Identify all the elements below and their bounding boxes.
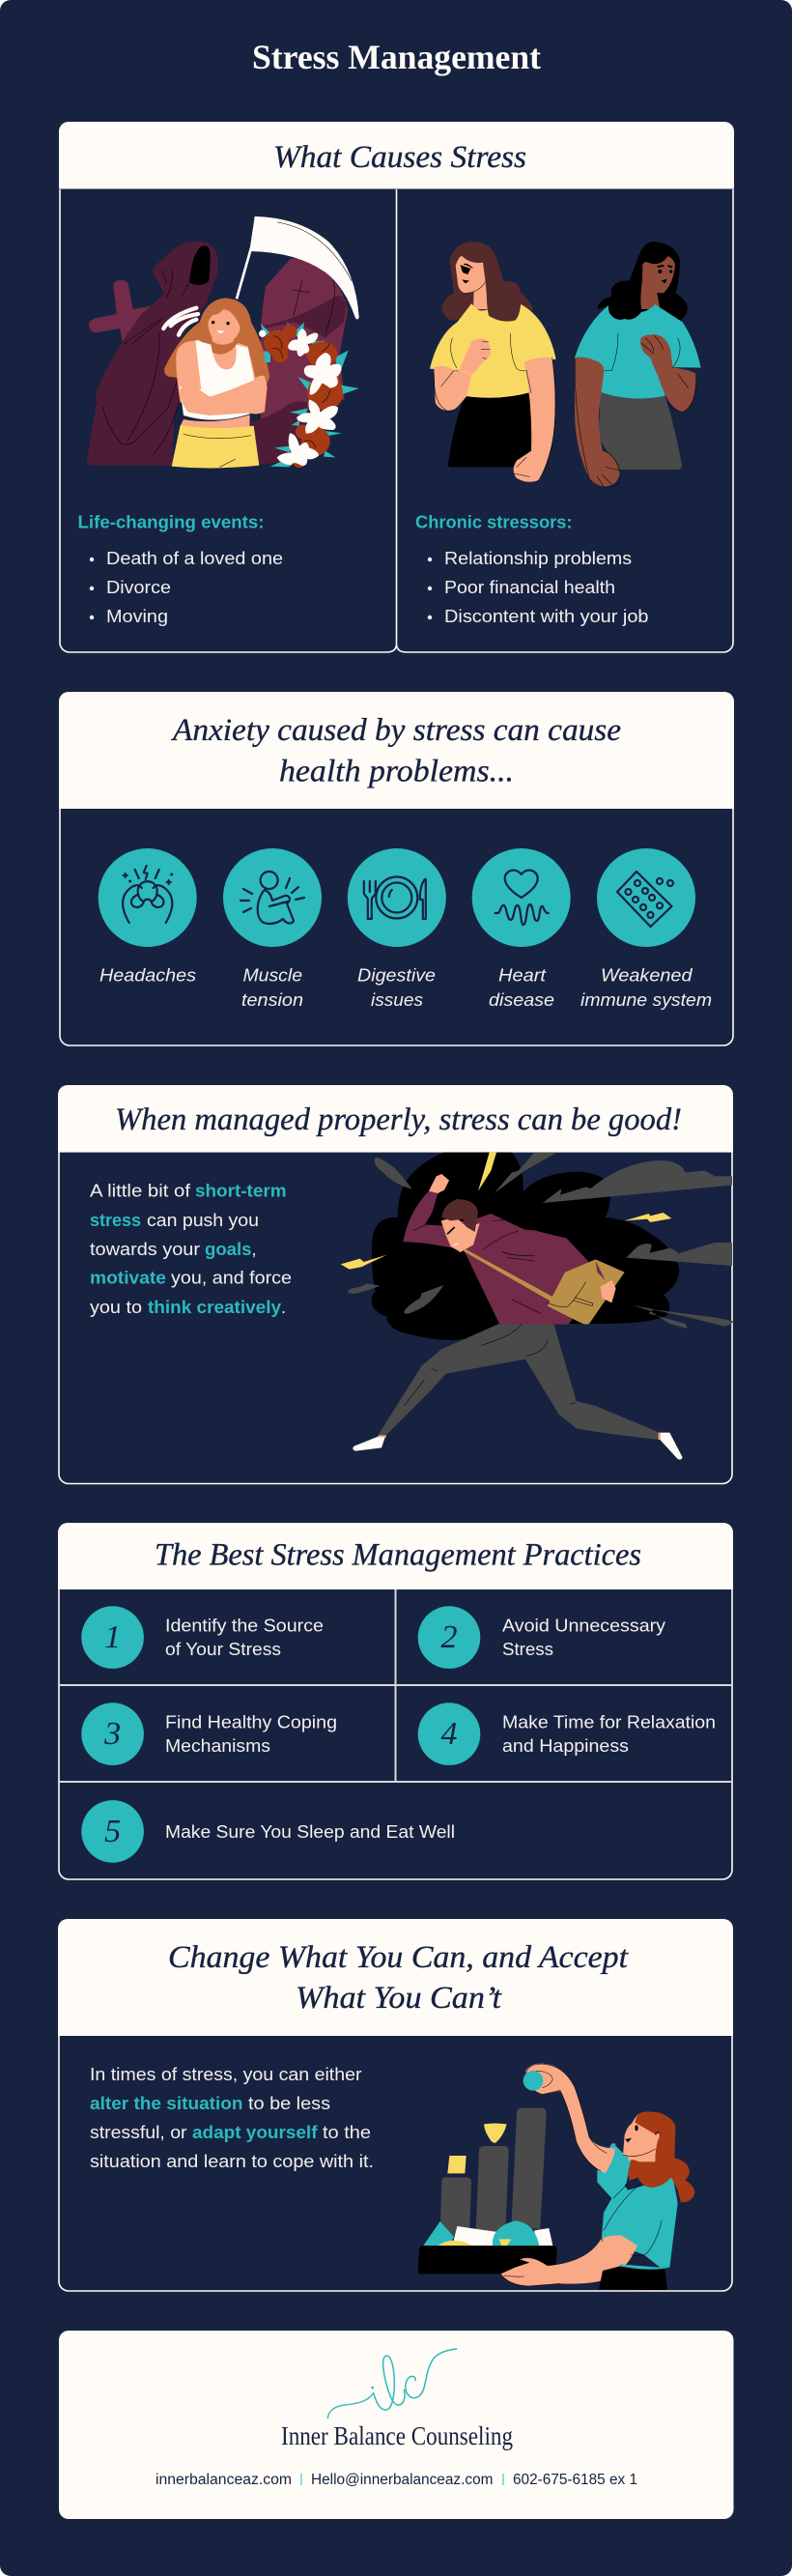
- text: alter or adapt: In times of stress, you can either: [90, 2065, 361, 2084]
- text: short-term stress: [90, 1182, 292, 1317]
- heading: change what you can: [58, 1919, 733, 2036]
- contact details: [156, 2472, 637, 2488]
- label: chronic stressors: Discontent with your job: [444, 607, 649, 626]
- illustration: two stressed women: [430, 242, 701, 487]
- panel: footer: [59, 2331, 734, 2519]
- text: short-term stress: towards your: [90, 1240, 200, 1259]
- step 1: 1: [104, 1619, 121, 1655]
- company name: Inner Balance Counseling: [281, 2421, 513, 2450]
- step 4: Make Time for Relaxation: [502, 1713, 716, 1732]
- step 1: Identify the Source: [165, 1617, 324, 1636]
- heading: health problems: [59, 692, 734, 809]
- label: heart disease: disease: [489, 990, 554, 1010]
- text: short-term stress: think creatively: [148, 1298, 281, 1317]
- step 5: 5: [104, 1814, 121, 1849]
- label: life-changing events: Death of a loved one: [106, 549, 283, 568]
- label: chronic stressors: Relationship problems: [444, 549, 632, 568]
- step 2: Avoid Unnecessary: [502, 1617, 665, 1636]
- logo: ibc: [327, 2349, 457, 2419]
- icon: heart disease: [472, 848, 571, 947]
- label: weakened immune system: immune system: [580, 990, 712, 1010]
- text: alter or adapt: situation and learn to cope with it.: [90, 2152, 374, 2171]
- title: Stress Management: [252, 38, 541, 76]
- step 1: [81, 1606, 324, 1669]
- text: short-term stress: can push you: [147, 1211, 259, 1230]
- panel: what causes stress: [59, 122, 734, 652]
- panel: good stress: [58, 1085, 733, 1484]
- icon: weakened immune system: [597, 848, 695, 947]
- panel: stress management practices: [58, 1523, 733, 1879]
- label: muscle tension: tension: [241, 990, 303, 1010]
- heading: change what you can: What You Can’t: [296, 1981, 502, 2016]
- heading: good stress: [58, 1085, 733, 1153]
- label: chronic stressors: Poor financial health: [444, 578, 615, 597]
- text: short-term stress: A little bit of: [90, 1182, 191, 1201]
- text: short-term stress: ,: [251, 1240, 257, 1259]
- text: alter or adapt: to be less: [248, 2094, 330, 2113]
- label: chronic stressors: Chronic stressors:: [415, 512, 572, 531]
- label: digestive issues: issues: [371, 990, 423, 1010]
- step 3: 3: [103, 1716, 121, 1752]
- step 2: Stress: [502, 1640, 553, 1659]
- icon: muscle tension: [223, 848, 322, 947]
- contact details: 602-675-6185 ex 1: [513, 2472, 637, 2488]
- text: alter or adapt: [90, 2065, 374, 2171]
- heading: change what you can: Change What You Can, and Accept: [168, 1940, 629, 1975]
- illustration: man running from storm cloud: [341, 1153, 733, 1460]
- label: life-changing events: Divorce: [106, 578, 171, 597]
- step 1: of Your Stress: [165, 1640, 281, 1659]
- contact details: Hello@innerbalanceaz.com: [311, 2472, 493, 2488]
- label: muscle tension: [241, 965, 303, 1010]
- text: short-term stress: .: [281, 1298, 286, 1317]
- label: heart disease: [489, 965, 554, 1010]
- label: life-changing events: [77, 512, 283, 626]
- heading: health problems: health problems...: [279, 754, 514, 788]
- heading: practices: The Best Stress Management Practices: [155, 1538, 641, 1573]
- heading: practices: [58, 1523, 733, 1589]
- text: alter or adapt: stressful, or: [90, 2123, 187, 2142]
- heading: health problems: Anxiety caused by stress can cause: [171, 713, 621, 748]
- step 4: 4: [440, 1716, 458, 1752]
- step 2: [418, 1606, 665, 1669]
- label: life-changing events: Moving: [106, 607, 168, 626]
- illustration: grim reaper and frightened woman: [87, 216, 359, 468]
- label: weakened immune system: [580, 965, 712, 1010]
- heading: what causes stress: [59, 122, 734, 189]
- text: short-term stress: stress: [90, 1211, 141, 1230]
- label: heart disease: Heart: [498, 965, 547, 985]
- text: short-term stress: you to: [90, 1298, 142, 1317]
- step 3: Find Healthy Coping: [165, 1713, 337, 1732]
- contact details: innerbalanceaz.com: [156, 2472, 292, 2488]
- heading: what causes stress: What Causes Stress: [273, 140, 526, 175]
- illustration: woman stacking blocks: [418, 2064, 694, 2290]
- label: digestive issues: [357, 965, 436, 1010]
- step 4: [418, 1703, 716, 1765]
- step 3: [81, 1703, 337, 1765]
- step 4: and Happiness: [502, 1736, 629, 1756]
- panel: health problems: [59, 692, 734, 1045]
- step 5: Make Sure You Sleep and Eat Well: [165, 1822, 455, 1842]
- text: short-term stress: goals: [205, 1240, 251, 1259]
- text: short-term stress: short-term: [195, 1182, 286, 1201]
- label: weakened immune system: Weakened: [601, 965, 693, 985]
- label: headaches: Headaches: [99, 965, 196, 985]
- step 2: 2: [440, 1619, 458, 1655]
- step 5: [81, 1800, 455, 1863]
- label: chronic stressors: [415, 512, 649, 626]
- heading: good stress: When managed properly, stress can be good!: [115, 1102, 682, 1137]
- icon: digestive issues: [348, 848, 446, 947]
- label: muscle tension: Muscle: [243, 965, 302, 985]
- panel: change what you can: [58, 1919, 733, 2291]
- text: alter or adapt: to the: [323, 2123, 371, 2142]
- text: alter or adapt: alter the situation: [90, 2094, 243, 2113]
- text: alter or adapt: adapt yourself: [192, 2123, 319, 2142]
- label: digestive issues: Digestive: [357, 965, 436, 985]
- text: short-term stress: you, and force: [171, 1269, 292, 1288]
- step 3: Mechanisms: [165, 1736, 270, 1756]
- text: short-term stress: motivate: [90, 1269, 166, 1288]
- icon: headaches: [99, 848, 197, 947]
- label: life-changing events: Life-changing events:: [77, 512, 265, 531]
